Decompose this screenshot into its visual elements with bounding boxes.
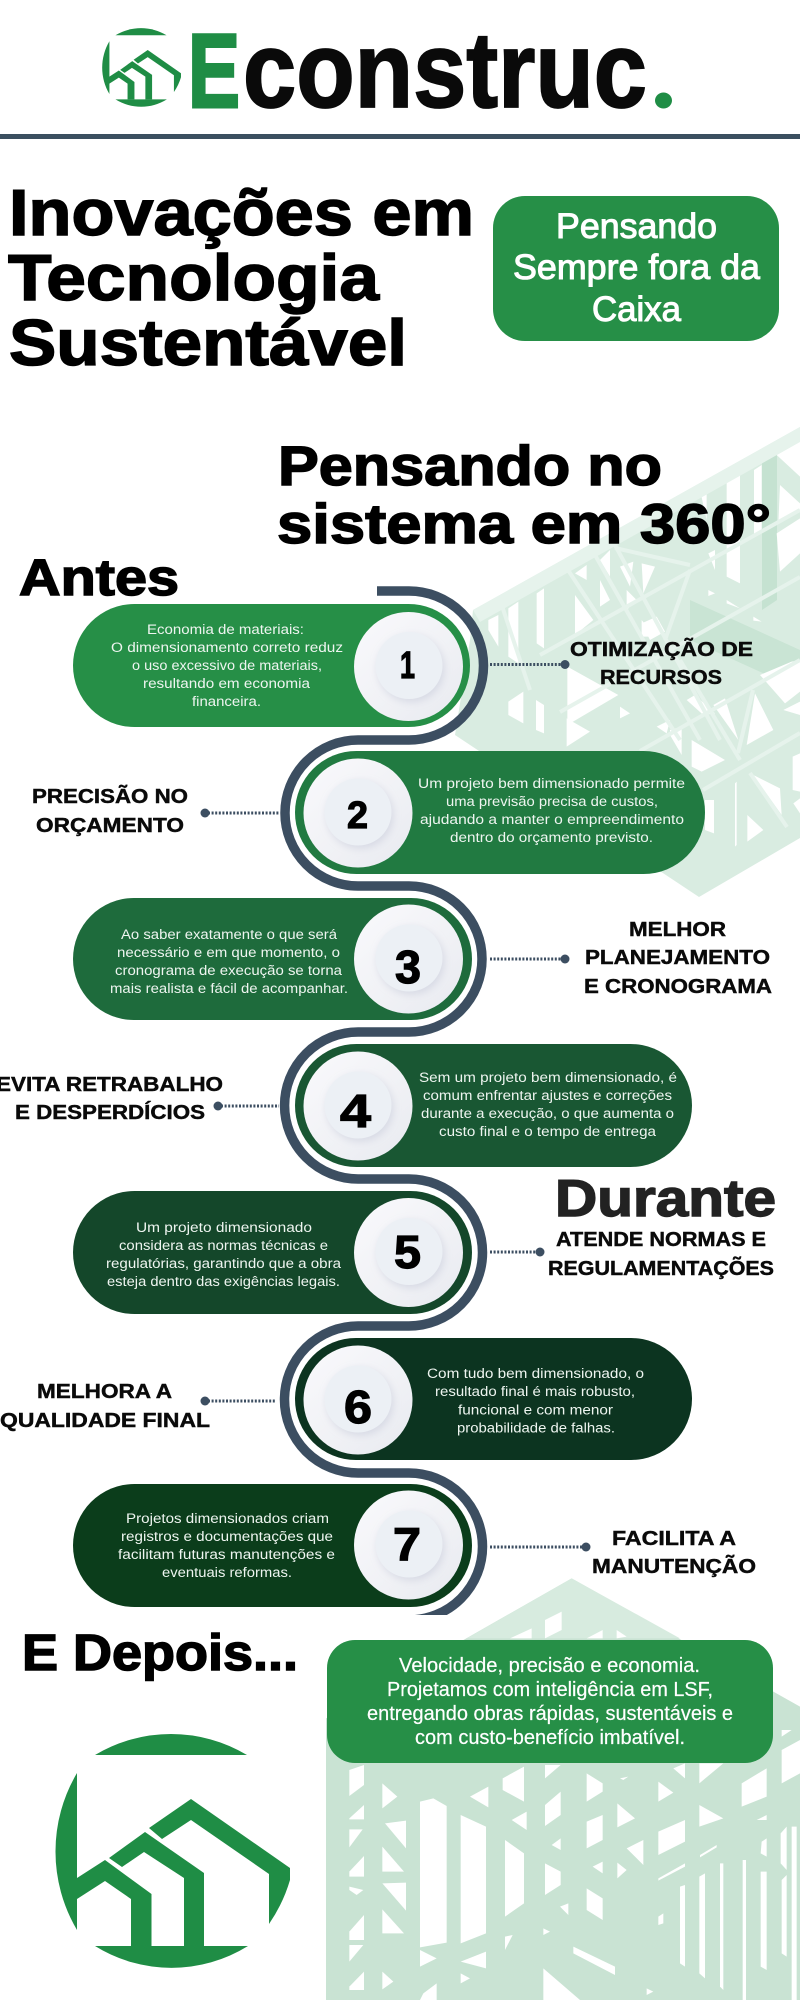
connector 2 — [200, 808, 279, 818]
label: atende normas e regulamentações: REGULAMENTAÇÕES — [548, 1256, 774, 1280]
step 3 text: mais realista e fácil de acompanhar. — [110, 981, 348, 996]
step 2 number badge — [304, 758, 412, 868]
label: atende normas e regulamentações: ATENDE NORMAS E — [556, 1229, 766, 1251]
connector 5 — [490, 1248, 544, 1256]
label: melhora a qualidade final — [0, 1381, 210, 1432]
step 6 text: probabilidade de falhas. — [457, 1420, 615, 1436]
connector 1 — [490, 660, 570, 669]
background: steel frame building — [326, 1578, 800, 2000]
icon: large logo mark — [55, 1734, 290, 1968]
step 1 panel — [73, 604, 470, 727]
callout: velocidade, precisão e economia — [327, 1640, 773, 1763]
label: melhora a qualidade final: QUALIDADE FINAL — [0, 1410, 210, 1432]
step 7 text: Projetos dimensionados criam — [126, 1511, 329, 1526]
step 1 text: Economia de materiais: — [147, 622, 304, 637]
step 6 text: resultado final é mais robusto, — [435, 1384, 635, 1399]
heading: Pensando no sistema em 360°: Pensando no — [278, 434, 662, 497]
step 2 text: ajudando a manter o empreendimento — [420, 812, 684, 827]
step 4 text: durante a execução, o que aumenta o — [421, 1106, 674, 1121]
title: Inovações em — [9, 176, 474, 249]
step 4 text: comum enfrentar ajustes e correções — [423, 1088, 672, 1103]
step 3 number badge — [354, 904, 463, 1014]
step 6 panel — [295, 1338, 692, 1460]
label: facilita a manutenção: MANUTENÇÃO — [592, 1555, 756, 1578]
step 4 panel — [295, 1044, 692, 1167]
label: facilita a manutenção — [592, 1528, 756, 1578]
step 7 number badge — [354, 1490, 463, 1600]
step 7 number badge: 7 — [393, 1518, 421, 1570]
step 4 text — [419, 1070, 677, 1139]
label: melhor planejamento e cronograma: MELHOR — [629, 919, 727, 941]
step 4 number badge: 4 — [340, 1085, 371, 1137]
step 5 number badge: 5 — [394, 1226, 421, 1278]
logo: Econstruc header — [102, 9, 672, 130]
step 5 text: esteja dentro das exigências legais. — [107, 1274, 340, 1289]
heading: Pensando no sistema em 360° — [277, 434, 771, 555]
step 5 text — [106, 1220, 342, 1289]
label: melhor planejamento e cronograma: E CRONOGRAMA — [584, 976, 772, 998]
heading: E Depois...: E Depois... — [22, 1624, 298, 1681]
label: evita retrabalho e desperdícios: EVITA RETRABALHO — [0, 1074, 223, 1096]
step 6 text: Com tudo bem dimensionado, o — [427, 1366, 644, 1381]
step 7 panel — [73, 1484, 472, 1607]
step 1 number badge — [354, 612, 463, 721]
callout: Pensando Sempre fora da Caixa: Sempre fora da — [513, 248, 761, 287]
heading: Pensando no sistema em 360°: sistema em 360° — [277, 492, 771, 555]
step 5 text: considera as normas técnicas e — [119, 1238, 328, 1253]
label: precisão no orçamento — [32, 785, 188, 837]
step 7 text: facilitam futuras manutenções e — [118, 1547, 335, 1562]
connector 7 — [490, 1542, 590, 1552]
callout: Pensando Sempre fora da Caixa: Pensando — [556, 207, 717, 246]
label: precisão no orçamento: PRECISÃO NO — [32, 785, 188, 808]
title: Tecnologia — [8, 241, 380, 314]
step 7 text: registros e documentações que — [121, 1529, 333, 1544]
title: Sustentável — [9, 306, 407, 379]
step 6 number badge — [304, 1346, 412, 1454]
step 5 text: regulatórias, garantindo que a obra — [106, 1256, 342, 1271]
step 1 text: o uso excessivo de materiais, — [132, 658, 322, 673]
step 1 text: O dimensionamento correto reduz — [111, 640, 343, 655]
step 2 panel — [295, 751, 705, 874]
step 3 text — [110, 927, 348, 996]
step 3 text: necessário e em que momento, o — [117, 945, 340, 960]
step 2 text: dentro do orçamento previsto. — [450, 830, 653, 845]
step 6 number badge: 6 — [344, 1381, 372, 1433]
label: melhora a qualidade final: MELHORA A — [37, 1381, 172, 1403]
step 2 text — [418, 776, 685, 845]
callout: velocidade, precisão e economia: com custo-benefício imbatível. — [415, 1727, 685, 1749]
step 6 text — [427, 1366, 644, 1436]
step 3 number badge: 3 — [395, 941, 421, 993]
step 4 number badge — [304, 1052, 412, 1160]
logo wordmark: construc — [243, 9, 647, 130]
background: steel frame roof truss — [455, 427, 800, 897]
connector 4 — [214, 1102, 279, 1110]
step 4 text: Sem um projeto bem dimensionado, é — [419, 1070, 677, 1085]
callout: velocidade, precisão e economia: Projetamos com inteligência em LSF, — [387, 1679, 713, 1701]
step 4 text: custo final e o tempo de entrega — [439, 1124, 657, 1139]
heading: Antes: Antes — [19, 549, 179, 606]
serpentine path — [284, 591, 484, 1620]
title — [8, 176, 474, 379]
label: otimização de recursos: OTIMIZAÇÃO DE — [570, 638, 753, 661]
step 1 text: financeira. — [192, 694, 261, 709]
callout: velocidade, precisão e economia: entregando obras rápidas, sustentáveis e — [367, 1703, 733, 1725]
step 6 text: funcional e com menor — [458, 1402, 614, 1418]
label: evita retrabalho e desperdícios: E DESPERDÍCIOS — [15, 1101, 205, 1124]
step 2 text: Um projeto bem dimensionado permite — [418, 776, 685, 791]
step 3 text: Ao saber exatamente o que será — [121, 927, 338, 942]
step 5 panel — [73, 1191, 472, 1314]
label: precisão no orçamento: ORÇAMENTO — [36, 815, 184, 837]
step 1 text: resultando em economia — [143, 676, 311, 691]
step 3 panel — [73, 898, 472, 1020]
icon: logo mark — [102, 28, 181, 107]
step 1 number badge: 1 — [400, 645, 415, 687]
step 2 text: uma previsão precisa de custos, — [446, 794, 658, 809]
label: facilita a manutenção: FACILITA A — [612, 1528, 736, 1550]
step 7 text: eventuais reformas. — [162, 1565, 292, 1580]
heading: Durante: Durante — [555, 1170, 776, 1228]
step 5 text: Um projeto dimensionado — [136, 1220, 312, 1235]
label: atende normas e regulamentações — [548, 1229, 774, 1280]
callout: Pensando Sempre fora da Caixa — [493, 196, 779, 341]
label: evita retrabalho e desperdícios — [0, 1074, 223, 1124]
label: melhor planejamento e cronograma — [584, 919, 772, 998]
callout: velocidade, precisão e economia: Velocidade, precisão e economia. — [399, 1655, 700, 1677]
step 2 number badge: 2 — [347, 795, 368, 837]
logo wordmark: E — [188, 13, 240, 130]
label: melhor planejamento e cronograma: PLANEJAMENTO — [585, 947, 770, 969]
callout: Pensando Sempre fora da Caixa: Caixa — [592, 290, 682, 329]
step 1 text — [111, 622, 343, 709]
step 3 text: cronograma de execução se torna — [115, 963, 343, 978]
label: otimização de recursos — [570, 638, 753, 689]
connector 3 — [490, 954, 570, 964]
step 5 number badge — [354, 1198, 463, 1307]
connector 6 — [200, 1396, 276, 1406]
label: otimização de recursos: RECURSOS — [600, 667, 722, 689]
step 7 text — [118, 1511, 335, 1580]
